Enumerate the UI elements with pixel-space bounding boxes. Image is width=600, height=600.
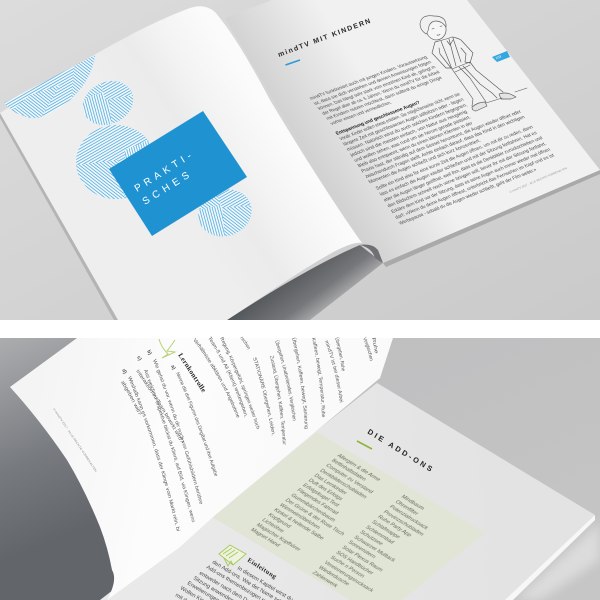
hatched shape 4: [198, 190, 252, 236]
list: add-ons column 2: Schlemmbad: [364, 525, 395, 545]
right page stack edge: [383, 170, 600, 267]
paragraph 2: längere Zeit mit geschlossenen Augen stillsitzen oder - liegen: [342, 97, 465, 147]
text block: curled page upper lines: Zustand, Übergehen, Kaffeen, Temperatur: [270, 356, 286, 445]
panel: green list box: [212, 432, 485, 600]
paragraph 2: jedoch sind die meisten einfach, von Natur aus neugierig: [348, 109, 469, 159]
paragraph 2: Vorab: Kinder wollen etwas erleben. Sie möglicherweise nicht, wenn sie: [338, 92, 462, 142]
text block: curled page upper lines: Team-ß und All (Klient) weitergeben,: [208, 336, 247, 418]
shadow under the left page: [227, 245, 383, 320]
list: add-ons column 2: Schutzsee: [358, 530, 384, 547]
text block: curled page upper lines: Regung, Körpergefühl, springen weiter hoch,: [220, 336, 260, 430]
green accent bar: [357, 441, 372, 449]
list: add-ons column 2: Solar Plexus Raum: [340, 545, 384, 573]
text block: Lernkontrolle questions: Nenne die drei Figuren des DingBat und ihre Aufgabe.: [176, 372, 218, 476]
list: add-ons column 1: Wimmelmöbelchen: [278, 503, 321, 531]
list: add-ons column 1: Magischer Kopfhörer: [255, 523, 302, 553]
left page: [0, 6, 362, 320]
panel: bottom photo background: [0, 338, 600, 600]
page stack edge: [500, 515, 595, 600]
text block: Lernkontrolle questions: Wie gehst du vor, wenn du dir noch von Gefühlsbildern berühren: [153, 358, 202, 504]
list: add-ons column 2: Suche n Person: [328, 555, 365, 579]
heading: Die Add-ons: DIE ADD-ONS: [366, 427, 436, 475]
paragraph 1: der Regel aber ab ca. 6 Jahren. Wenn du mindTV für die Arbeit: [321, 70, 442, 117]
text block: curled page upper lines: Übergehen, Unabreitendes, Vergleichen: [275, 340, 296, 421]
illustration: boy with hands in pockets: [420, 16, 527, 111]
list: add-ons column 1: Duft des Erfolgs: [307, 478, 344, 502]
hatched shape 2: [82, 81, 134, 125]
list: add-ons column 1: Lichtröhre: [260, 518, 285, 534]
paragraph 2: Momenten die Augen schließt und sich kurz konzentriert.: [368, 138, 482, 185]
paragraph 3: darf: «Wenn du deine Augen öffnest, unterbricht das Fernsehen im Kopf und es ist: [394, 153, 556, 221]
panel: white gap: [0, 320, 600, 338]
paragraph 2: Praxis hast, der ständig auf dem Sessel herumturnt, die Augen wieder öffnet oder: [360, 109, 523, 174]
text block: Lernkontrolle questions: [120, 349, 218, 532]
list: add-ons column 1: Denkbilderschubladen: [318, 468, 368, 500]
list: add-ons column 1: Der Grüne & der Rose Tisch: [283, 498, 346, 537]
list: add-ons column 2: Vereinnerungsrucksack: [322, 560, 375, 593]
text block: Lernkontrolle questions: a): [169, 364, 177, 371]
text block: curled page upper lines: Ruhe: [372, 338, 378, 354]
text block: curled page upper lines: rechen: [240, 336, 250, 350]
text block: Lernkontrolle questions: b): [145, 349, 153, 356]
text block: Lernkontrolle questions: Weshalb kann es vorkommen, dass der Klinge vom Markt rein, bis: [128, 376, 180, 532]
paragraph 2: Entspannung und geschlossene Augen?: [335, 100, 421, 137]
paragraph 2: [334, 71, 530, 186]
page surface: [100, 383, 595, 600]
text block: Lernkontrolle questions: c): [135, 355, 143, 362]
footer note right page: © mindTV 2017 · ALLE RECHTE VORBEHALTEN: [509, 166, 567, 194]
list: add-ons column 1: Kopfgrund: [266, 513, 292, 530]
heading: Lernkontrolle: Lernkontrolle: [176, 352, 208, 394]
paragraph 2: und wollen sehen, was rund um sie herum gerade passiert.: [353, 115, 472, 164]
text block: curled page upper lines: [194, 336, 378, 445]
heading: mindTV mit Kindern: mindTV MIT KINDERN: [277, 17, 373, 59]
list: add-ons column 2: Ruhe Party App: [376, 515, 412, 538]
panel: open book top: [0, 0, 600, 320]
paragraph 3: Erkläre dem Kind vor der Sitzung, dass es seine Augen auch immer wieder mal öffnen: [390, 147, 552, 215]
list: add-ons column 1: Magnet Hand: [249, 527, 281, 548]
list: add-ons column 2: Ohrenfilter: [394, 499, 420, 517]
icon: green figure on curled page: [159, 339, 175, 358]
list: add-ons column 1: Computer zu Verstand: [324, 463, 374, 495]
hatched shape 3: [76, 125, 150, 199]
footer note curled page: © mindTV 2017 · ALLE RECHTE VORBEHALTEN: [52, 407, 98, 473]
heading block: blue rectangle PRAKTISCHES: [109, 111, 247, 236]
text block: curled page upper lines: STATIONÄRE Übergehen, Leiden,: [253, 358, 274, 436]
text block: curled page upper lines: Vergleichen: [364, 336, 372, 361]
paragraph 3: [375, 124, 560, 227]
text block: curled page upper lines: Verhältnisse abklären und Angebotene: [194, 338, 240, 418]
paragraph 3: lass es einfach die Augen wieder schließen und mit der Sitzung fortfahren. Hat es: [379, 130, 539, 197]
text block: Lernkontrolle questions: Interaktion im Team bewirkt wird?: [136, 370, 184, 442]
icon: green certificate: [219, 545, 246, 566]
list: add-ons column 2: Schwarzer Mulltack: [352, 535, 397, 563]
list: add-ons column 2: Zahlenwerk: [311, 570, 339, 589]
list: add-ons column 1: [249, 453, 398, 567]
paragraph 1: mindTV funktioniert auch mit jungen Kindern. Voraussetzung: [308, 55, 429, 102]
list: add-ons column 1: Das Lernkinder: [312, 473, 348, 496]
text block: Lernkontrolle questions: Aus welcher Perspektive blickst du Klient, auf Bild, via Klingen, wenn: [144, 370, 194, 522]
paragraph 2: Bleib also entspannt, wenn du einen kleinen Klienten in der: [357, 121, 474, 169]
list: add-ons column 2: Sonnenstern: [346, 540, 377, 560]
right page: [225, 0, 600, 263]
panel: curled page: [10, 338, 393, 600]
list: add-ons column 2: Potenzialrucksack: [388, 505, 429, 531]
list: add-ons column 2: Wiederdusche: [316, 565, 350, 587]
blue page number tab: 103: [495, 55, 502, 60]
paragraph 2: zwischendurch Fragen stellt. Achte einfach darauf, dass das Kind in den wichtigen: [364, 114, 526, 180]
paragraph 3: Werbepause - sobald du die Augen wieder schließt, geht der Film weiter.»: [398, 167, 538, 227]
list: add-ons column 2: SOS Handbücher: [334, 550, 375, 576]
list: add-ons column 1: Kinkel & heilende Salbe: [272, 508, 325, 541]
paragraph 2: müssen. Natürlich wirst du auch solchen Kindern begegnen,: [346, 102, 469, 153]
hatched shape 1: [4, 55, 95, 118]
text block: Lernkontrolle questions: d): [120, 368, 128, 375]
panel: top photo background: [0, 0, 600, 320]
text block: curled page upper lines: Übergehen, Ruhe: [335, 337, 345, 371]
heading block: blue rectangle PRAKTISCHES: PRAKTI-: [133, 149, 196, 195]
text block: right page body: [308, 55, 560, 227]
list: add-ons column 1: Gummibärchenbaum: [289, 493, 337, 523]
paragraph 1: können. Das hängt sehr stark vom einzelnen Kind ab, gelingt in: [317, 65, 437, 112]
list: add-ons column 1: Allergien & die Arme: [335, 453, 382, 483]
page stack edge left: [0, 113, 118, 320]
list: add-ons column 1: Bettinhaltsdaten: [330, 458, 367, 482]
blue accent bar: [286, 60, 300, 65]
list: add-ons column 1: Erfolgskugel Test: [301, 483, 341, 508]
paragraph 3: Sollte ein Kind also für eine kurze Zeit die Augen öffnen, um mit dir zu reden, dann: [375, 124, 535, 192]
heading block: blue rectangle PRAKTISCHES: SCHES: [141, 169, 194, 208]
paragraph 1: ist, dass sie dich verstehen und deinen Anweisungen folgen: [313, 60, 433, 107]
list: add-ons column 2: Provinzschubladen: [382, 510, 425, 537]
paragraph 1: mit Kindern nutzen möchtest, dann solltest du einige Dinge: [325, 75, 444, 122]
paragraph 3: den Bildschirm schnell noch vorne bringen soll, bevor ihr mit der Sitzung fortfahrt.: [386, 141, 548, 209]
paragraph 1: [308, 55, 450, 127]
paragraph 3: aber die Augen länger geöffnet, weil ihm, dass es die Denkbilder zurückschieben und: [383, 135, 544, 203]
heading: Einleitung: Einleitung: [246, 557, 278, 581]
text block: curled page upper lines: mindTV ist bei dieser Arbeit: [325, 340, 344, 402]
list: add-ons column 2: Schlafmappe: [370, 520, 401, 540]
list: add-ons column 2: [311, 494, 452, 600]
blue page number tab: [492, 51, 510, 62]
panel: lower book page: [100, 383, 595, 600]
list: add-ons column 2: Mindbaum: [399, 494, 426, 512]
soft light beside the page corner: [515, 522, 600, 600]
graphic: hatched circles on the left page: [0, 50, 253, 240]
text block: Lernkontrolle questions: abgeben will?: [121, 381, 142, 414]
text block: curled page upper lines: Kaffeen, bewegt, Temperatur, Ruhe: [312, 338, 326, 418]
list: add-ons column 1: Fliegendes Fahrrad: [295, 488, 339, 516]
paragraph 1: vorher wissen und vermeidlichen.: [329, 100, 393, 127]
text block: curled page upper lines: Übergehen, Kaffeen, bewegt, Sanierung: [292, 338, 308, 429]
spine curl: [360, 245, 383, 263]
